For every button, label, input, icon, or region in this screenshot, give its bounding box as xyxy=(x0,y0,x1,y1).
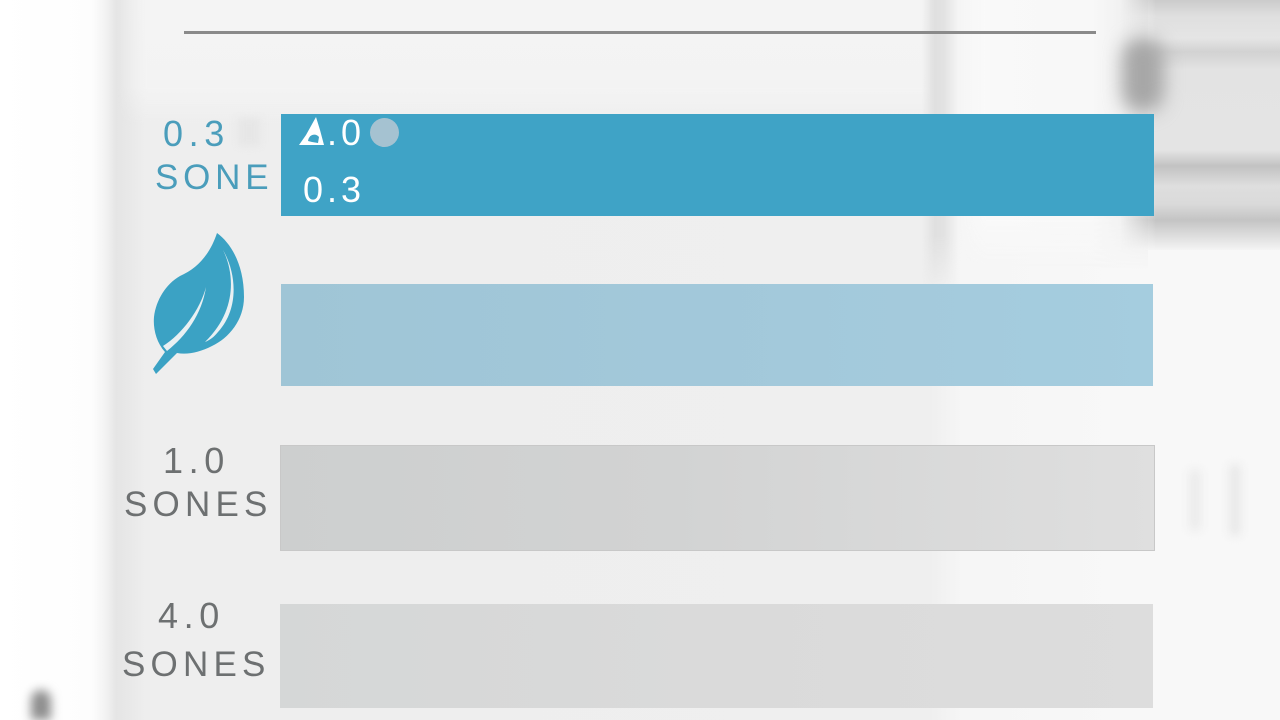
row: 4.0 sones label: SONES xyxy=(122,645,271,684)
row: 1.0 sones label: 1.0 xyxy=(163,440,230,481)
row: 1.0 sones label xyxy=(124,440,273,524)
bar text: animated 4.0 value: 4.0 xyxy=(303,112,365,153)
icon: glitched cone over the 4 xyxy=(299,117,324,145)
top divider line xyxy=(184,31,1096,34)
row: 0.3 sone label: 0.3 xyxy=(163,113,230,154)
bar: 1.0 sones (gray) xyxy=(280,445,1155,551)
row: 0.3 sone label: SONE xyxy=(155,158,273,197)
row: 1.0 sones label: SONES xyxy=(124,485,273,524)
bar: light blue xyxy=(281,284,1153,386)
row: 4.0 sones label xyxy=(122,595,271,684)
icon: leaf xyxy=(153,233,244,374)
bar text: 0.3 value: 0.3 xyxy=(303,169,365,210)
row: 0.3 sone label xyxy=(155,113,273,197)
row: 4.0 sones label: 4.0 xyxy=(158,595,225,636)
bar: 4.0 sones (gray) xyxy=(280,604,1153,708)
icon: fading dot xyxy=(370,118,399,147)
bar: 0.3 sone (blue) xyxy=(281,114,1154,216)
